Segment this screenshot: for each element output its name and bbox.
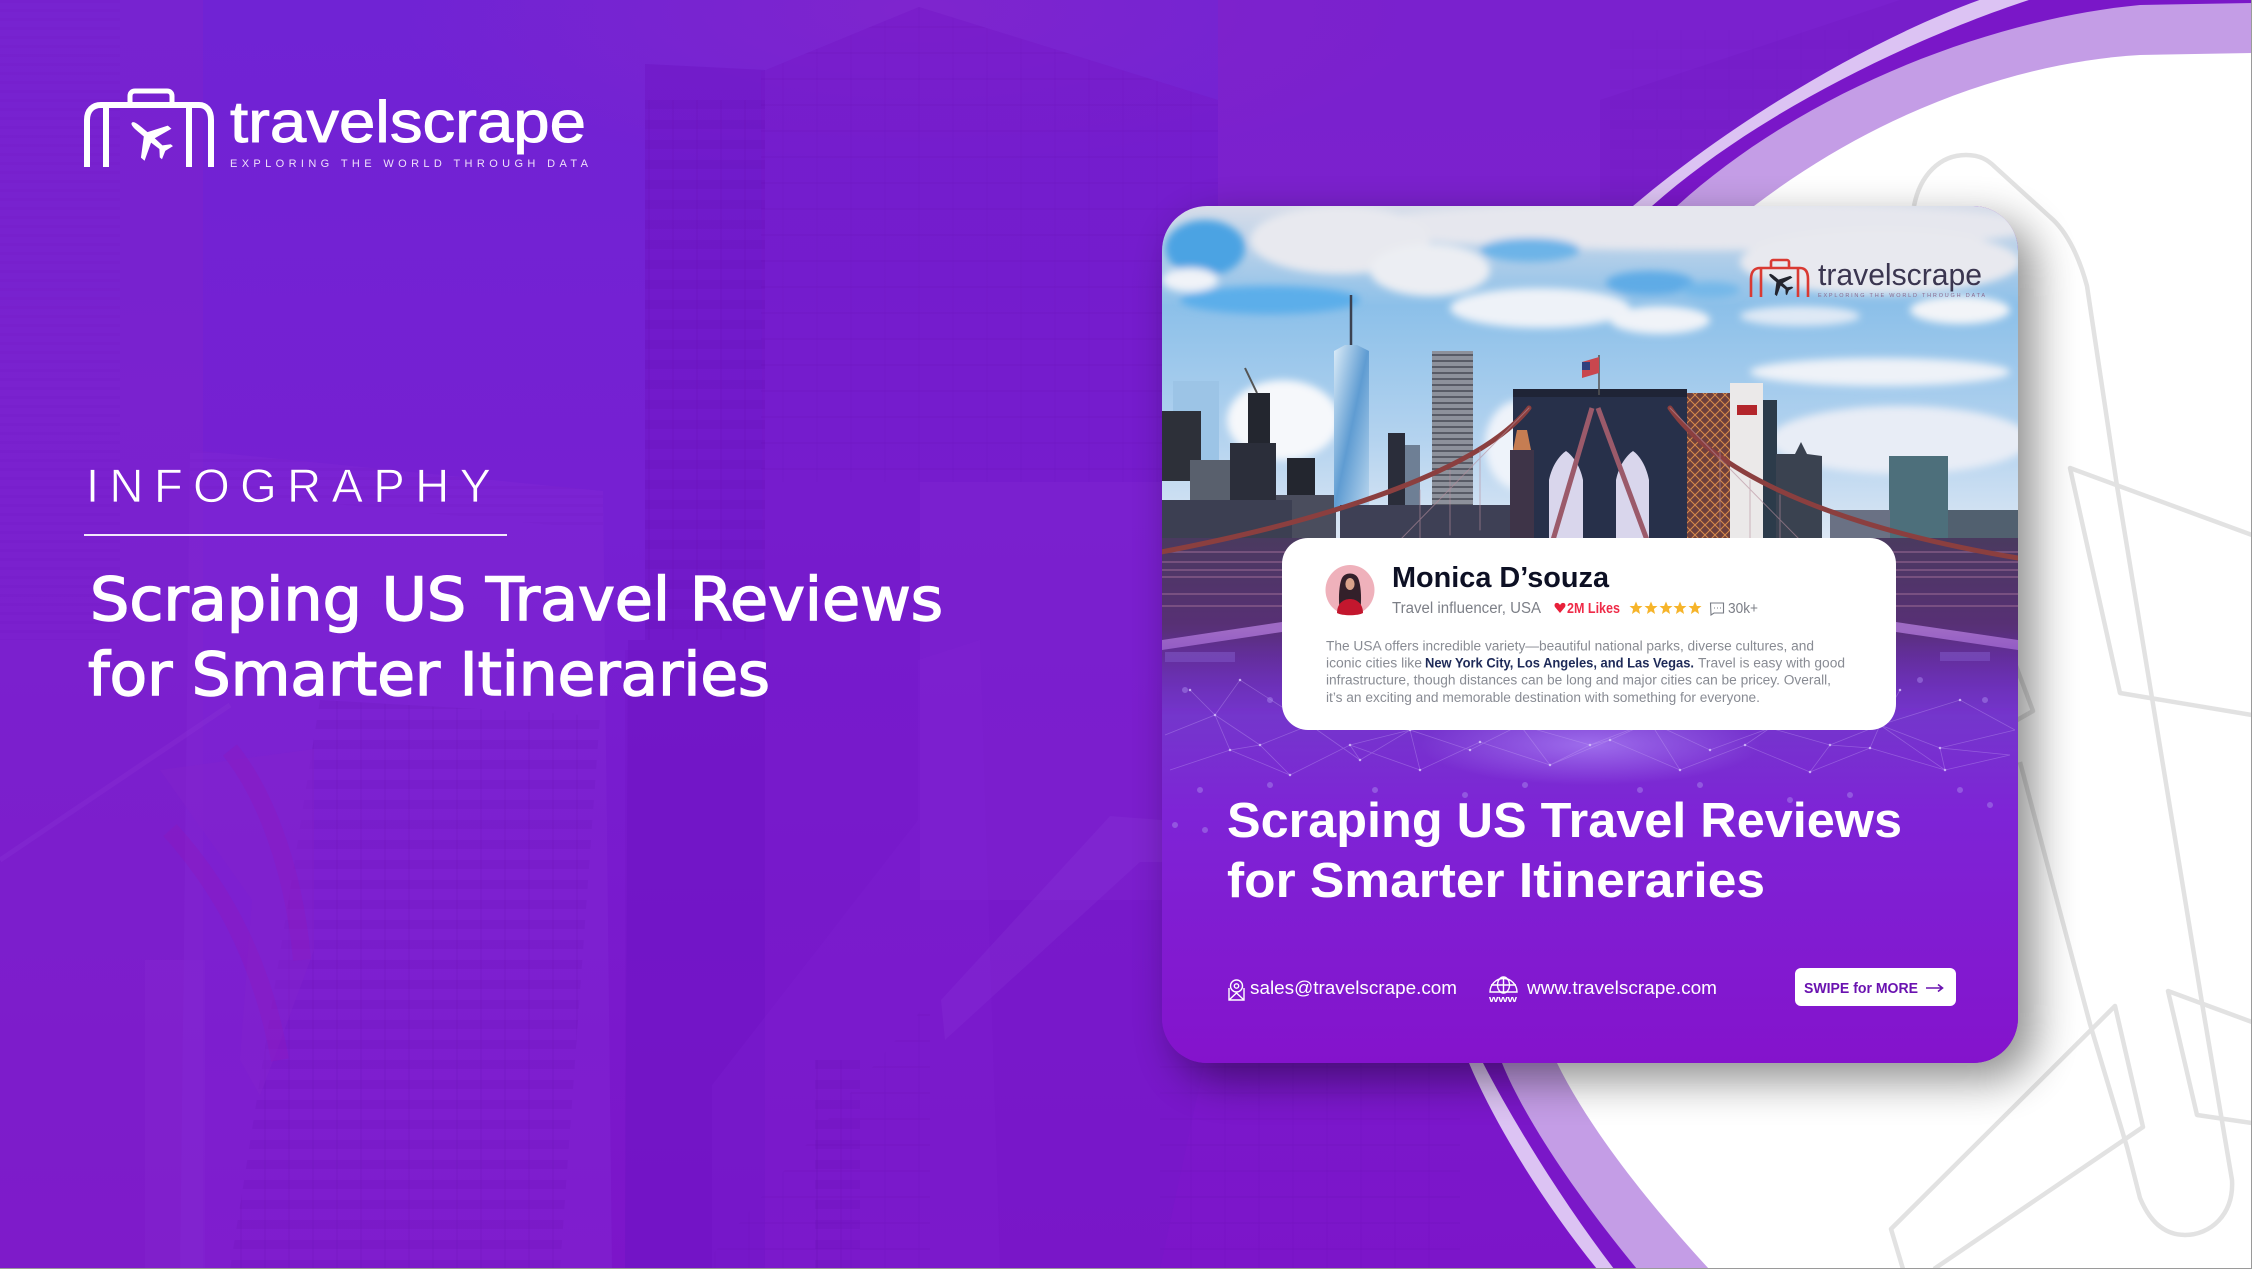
email address: sales@travelscrape.com — [1250, 978, 1457, 998]
swipe button — [1795, 968, 1956, 1006]
white circular area — [1557, 53, 2252, 1269]
review paragraph: infrastructure, though distances can be long and major cities can be pricey. Overall, — [1326, 672, 1831, 688]
card base — [1162, 206, 2018, 1063]
section label: INFOGRAPHY — [86, 459, 491, 512]
icon: comment — [1710, 603, 1724, 615]
card title — [1228, 802, 1900, 898]
dark central tower — [625, 7, 1218, 1269]
card logo wordmark: travelscrape — [1818, 257, 1982, 292]
top right faint building — [1600, 0, 1990, 200]
photo: bridge tower — [1510, 355, 1687, 540]
logo tagline: EXPLORING THE WORLD THROUGH DATA — [230, 158, 589, 170]
icon: arrow — [1926, 984, 1942, 992]
logo wordmark: travelscrape — [230, 90, 586, 155]
lower left building — [180, 450, 612, 1269]
website: www.travelscrape.com — [1526, 978, 1717, 998]
photo: sky — [1162, 202, 2040, 540]
photo: bridge deck — [1162, 538, 2018, 708]
lavender arc — [1502, 3, 2252, 1269]
icon: globe www — [1488, 977, 1518, 1004]
tail fin — [2168, 991, 2252, 1123]
review paragraph: The USA offers incredible variety—beautiful national parks, diverse cultures, and — [1326, 638, 1814, 654]
lower purple panel — [1162, 630, 2018, 1063]
card logo tagline: EXPLORING THE WORLD THROUGH DATA — [1818, 293, 1985, 299]
right diagonal buildings — [700, 640, 1460, 1269]
hidden wing tip — [2010, 650, 2033, 724]
review paragraph: iconic cities like — [1326, 656, 1422, 670]
card title: Scraping US Travel Reviews — [1227, 794, 1902, 848]
icon: email — [1229, 980, 1244, 1000]
photo: bridge cables — [1161, 408, 2018, 558]
reviewer name: Monica D’souza — [1392, 562, 1610, 594]
upper wing — [2070, 468, 2252, 715]
icon: flag — [1582, 355, 1599, 395]
review paragraph: New York City, Los Angeles, and Las Vegas. — [1425, 656, 1694, 670]
review paragraph: Travel is easy with good — [1698, 656, 1845, 670]
card shadow — [1178, 222, 2034, 1079]
data network — [1165, 680, 2015, 830]
reviewer meta: Travel influencer, USA — [1392, 600, 1542, 617]
rating stars — [1630, 602, 1702, 614]
icon: globe www: www — [1488, 994, 1518, 1004]
american flag — [0, 705, 314, 1096]
left tower strip — [0, 0, 205, 1269]
icon: heart — [1555, 603, 1565, 613]
main title: for Smarter Itineraries — [88, 640, 770, 710]
card logo — [1750, 258, 1985, 297]
panel: social post card — [1161, 202, 2040, 1063]
card title: for Smarter Itineraries — [1227, 854, 1765, 908]
light stripe arc — [1469, 0, 2252, 1269]
avatar — [1326, 565, 1374, 615]
icon: suitcase — [87, 91, 211, 169]
review paragraph — [1326, 638, 1845, 705]
dark stripe arc — [1483, 0, 2252, 1269]
review paragraph: it’s an exciting and memorable destination with something for everyone. — [1326, 690, 1760, 705]
photo: skyline — [1161, 295, 2018, 540]
section rule — [84, 534, 507, 536]
icon: red suitcase — [1751, 260, 1808, 301]
lower wing — [1891, 1006, 2143, 1269]
swipe button: SWIPE for MORE — [1804, 981, 1918, 997]
likes count: 2M Likes — [1567, 600, 1620, 617]
main title — [88, 565, 943, 710]
main title: Scraping US Travel Reviews — [90, 565, 943, 635]
comments count: 30k+ — [1728, 600, 1758, 617]
airplane outline — [1891, 155, 2252, 1269]
logo — [87, 90, 589, 170]
network glow — [1444, 730, 1737, 780]
review card — [1282, 538, 1896, 730]
